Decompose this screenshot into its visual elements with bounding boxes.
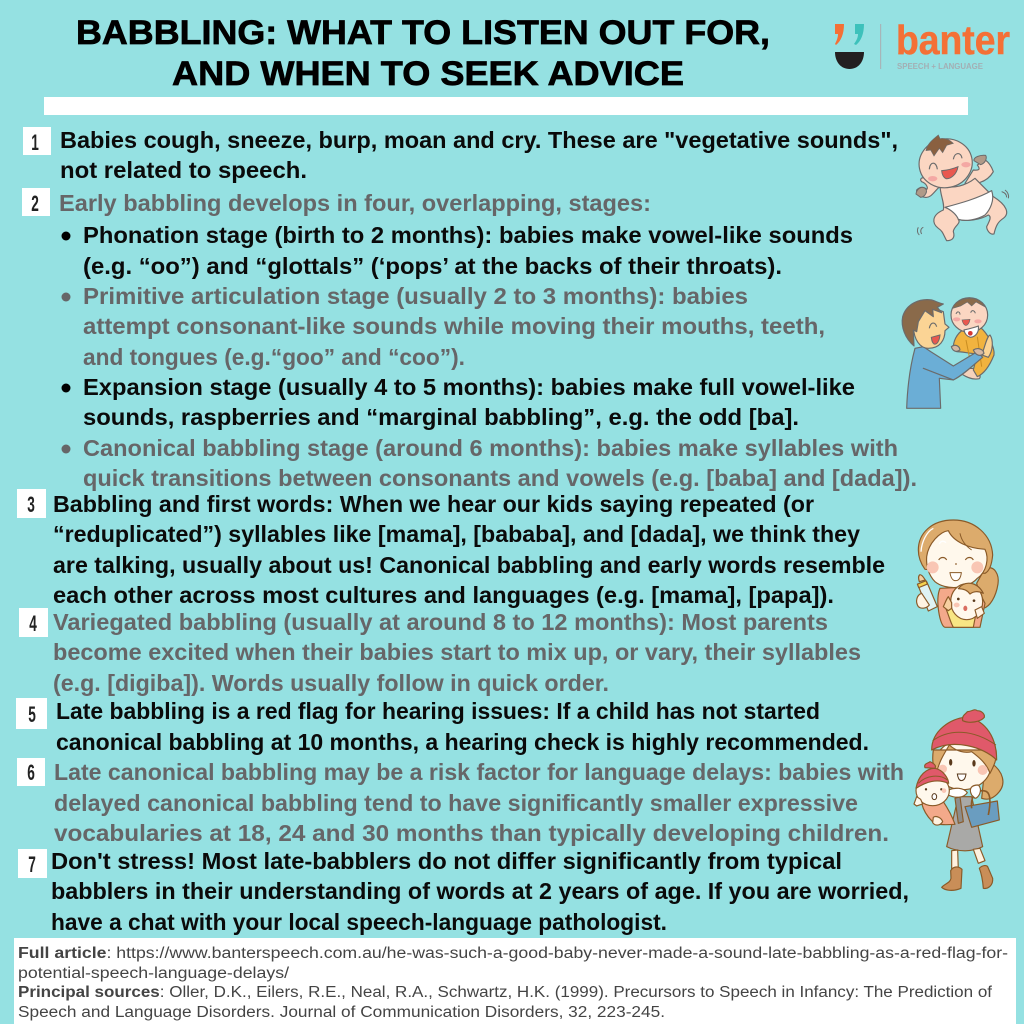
item 3: babbling and first words: 3: [27, 492, 35, 517]
item 7: don't stress: [18, 848, 909, 935]
item 7: don't stress: Don't stress! Most late-babblers do not differ significantly from typical: [51, 848, 842, 874]
bullet: primitive articulation stage: attempt consonant-like sounds while moving their mouths, teeth,: [83, 313, 825, 339]
item 3: babbling and first words: [17, 489, 885, 608]
item 7: don't stress: babblers in their understanding of words at 2 years of age. If you are worried,: [51, 878, 909, 904]
item 5: late babbling red flag: [16, 698, 869, 755]
item 2: early babbling stages: 2: [31, 191, 39, 216]
item 4: variegated babbling: 4: [29, 611, 37, 636]
footer: article link and sources: Principal sources : Oller, D.K., Eilers, R.E., Neal, R.A., Schwartz, H.K. (1999). Precursors to Speech in Infancy: The Prediction of: [18, 984, 993, 1001]
bullet: canonical babbling stage: quick transitions between consonants and vowels (e.g. [baba] and [dada]).: [83, 465, 917, 491]
item 1: vegetative sounds: [23, 127, 898, 183]
logo: banter speech and language: banter: [896, 17, 1010, 63]
item 1: vegetative sounds: 1: [31, 130, 39, 155]
logo: banter speech and language: [835, 17, 1010, 71]
item 6: late canonical babbling risk: Late canonical babbling may be a risk factor for language delays: babies with: [54, 759, 904, 785]
item 3: babbling and first words: each other across most cultures and languages (e.g. [mama], [papa]).: [53, 582, 834, 608]
item 1: vegetative sounds: not related to speech.: [60, 157, 307, 183]
bullet: primitive articulation stage: [62, 283, 825, 370]
bullet: canonical babbling stage: Canonical babbling stage (around 6 months): babies make syllables with: [83, 435, 898, 461]
footer: article link and sources: Full article : https://www.banterspeech.com.au/he-was-such-a-good-baby-never-made-a-sound-late-babbling-as-a-red-flag-for-: [18, 945, 1008, 962]
bullet: phonation stage: (e.g. “oo”) and “glottals” (‘pops’ at the backs of their throats).: [83, 253, 782, 279]
bullet: phonation stage: [62, 222, 853, 279]
item 4: variegated babbling: Variegated babbling (usually at around 8 to 12 months): Most parents: [53, 609, 828, 635]
white divider bar: [44, 97, 968, 115]
item 5: late babbling red flag: Late babbling is a red flag for hearing issues: If a child has not started: [56, 698, 820, 724]
logo: banter speech and language: SPEECH + LANGUAGE: [897, 62, 984, 71]
item 2: early babbling stages: [22, 188, 917, 491]
bullet: primitive articulation stage: and tongues (e.g.“goo” and “coo”).: [83, 344, 465, 370]
footer: article link and sources: Speech and Language Disorders. Journal of Communication Disorders, 32, 223-245.: [18, 1004, 665, 1021]
item 6: late canonical babbling risk: [17, 758, 904, 846]
item 5: late babbling red flag: 5: [28, 702, 36, 727]
title: AND WHEN TO SEEK ADVICE: [172, 55, 684, 93]
item 3: babbling and first words: are talking, usually about us! Canonical babbling and early words resemble: [53, 552, 885, 578]
bullet: expansion stage: sounds, raspberries and “marginal babbling”, e.g. the odd [ba].: [83, 404, 799, 430]
item 5: late babbling red flag: canonical babbling at 10 months, a hearing check is highly recommended.: [56, 729, 869, 755]
icon: mother with bottle and baby: [917, 520, 998, 627]
item 3: babbling and first words: Babbling and first words: When we hear our kids saying repeated (or: [53, 491, 814, 517]
item 4: variegated babbling: become excited when their babies start to mix up, or vary, their syllables: [53, 639, 861, 665]
bullet: phonation stage: Phonation stage (birth to 2 months): babies make vowel-like sounds: [83, 222, 853, 248]
item 4: variegated babbling: [19, 608, 861, 696]
icon: laughing baby in nappy: [915, 134, 1009, 241]
title: BABBLING: WHAT TO LISTEN OUT FOR,: [76, 14, 770, 52]
bullet: primitive articulation stage: Primitive articulation stage (usually 2 to 3 months): babies: [83, 283, 748, 309]
item 3: babbling and first words: “reduplicated”) syllables like [mama], [bababa], and [dada], we think they: [53, 521, 860, 547]
item 6: late canonical babbling risk: delayed canonical babbling tend to have significantly smaller expressive: [54, 790, 858, 816]
item 6: late canonical babbling risk: 6: [27, 760, 35, 785]
title: [76, 14, 770, 93]
footer: article link and sources: [14, 938, 1016, 1024]
bullet: expansion stage: Expansion stage (usually 4 to 5 months): babies make full vowel-like: [83, 374, 855, 400]
item 2: early babbling stages: Early babbling develops in four, overlapping, stages:: [59, 190, 651, 216]
icon: father lifting baby: [902, 298, 994, 408]
item 6: late canonical babbling risk: vocabularies at 18, 24 and 30 months than typically developing children.: [54, 820, 889, 846]
footer: article link and sources: potential-speech-language-delays/: [18, 965, 290, 982]
bullet: canonical babbling stage: [62, 435, 917, 491]
item 1: vegetative sounds: Babies cough, sneeze, burp, moan and cry. These are "vegetative sounds",: [60, 127, 898, 153]
icon: woman in red hat carrying baby: [914, 710, 1003, 890]
bullet: expansion stage: [62, 374, 855, 430]
item 7: don't stress: 7: [28, 852, 36, 877]
item 4: variegated babbling: (e.g. [digiba]). Words usually follow in quick order.: [53, 670, 609, 696]
item 7: don't stress: have a chat with your local speech-language pathologist.: [51, 909, 667, 935]
